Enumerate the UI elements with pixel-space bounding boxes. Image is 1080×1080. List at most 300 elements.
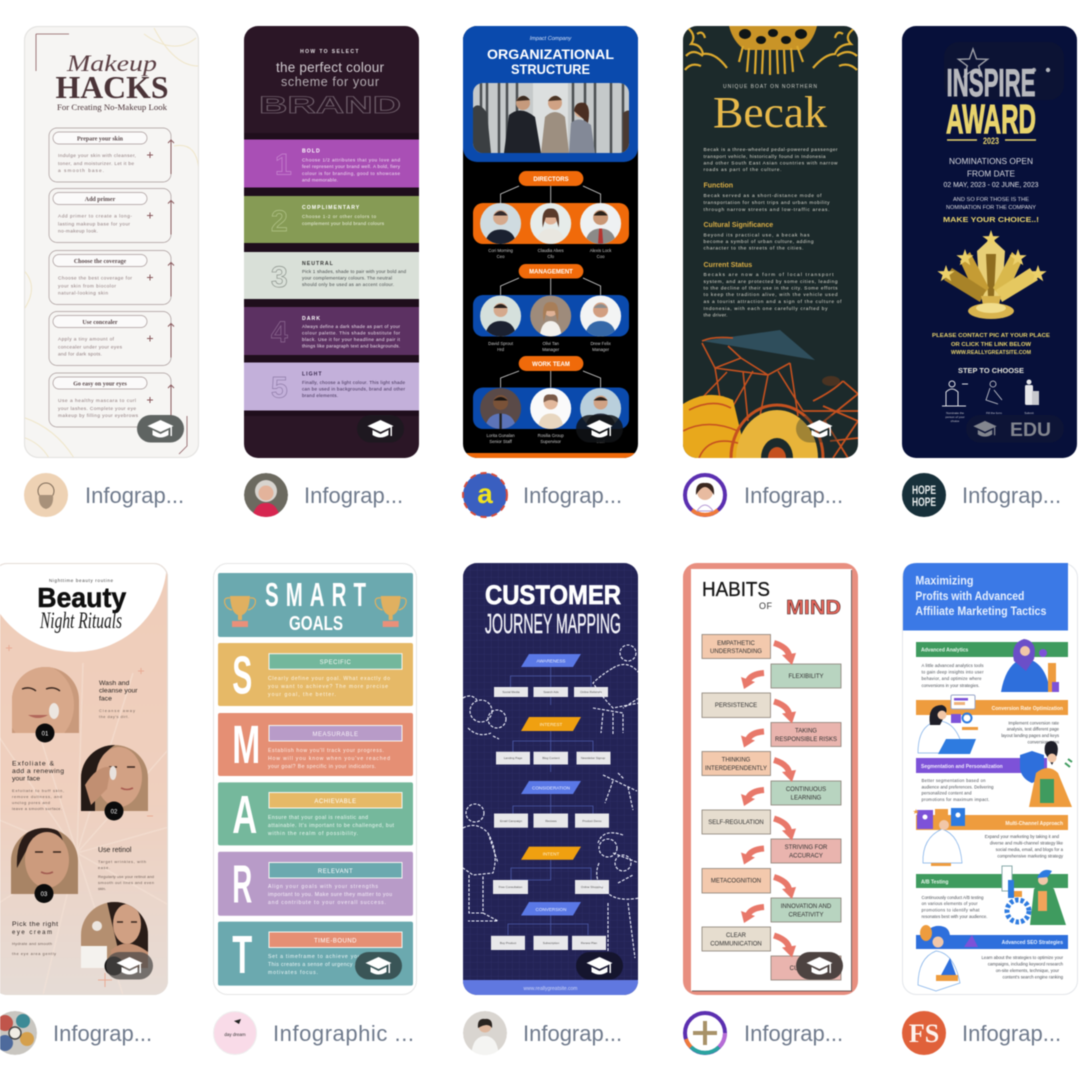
avatar: bearded man line art [24,473,68,517]
illustration: becak vehicle [682,330,859,459]
habit boxes: STRIVING FOR [785,845,828,851]
tip 2: Add primer [85,197,116,203]
text block: nominations: 02 MAY, 2023 - 02 JUNE, 2023 [944,182,1039,189]
tier: work team: Rosilia Group [538,433,564,438]
badge: education cap [796,952,843,980]
habit boxes: CONTINUOUS [786,787,826,793]
band: specific: S [232,646,252,706]
header: blue title: Profits with Advanced [915,591,1024,603]
caption: Infograp... [85,483,184,508]
tier: work team: Supervisor [540,439,562,444]
section: conversion rate optimization: Conversion Rate Optimization [992,706,1063,712]
section: conversion rate optimization: layout landing pages and keys [1001,733,1059,738]
habit boxes: INNOVATION AND [781,904,832,910]
step 3 number: 03 [41,892,48,898]
band 3: neutral: NEUTRAL [302,261,334,267]
heading: Makeup Hacks: HACKS [56,69,168,105]
habit boxes: PERSISTENCE [715,703,757,709]
heading: perfect colour scheme: the perfect colour [276,60,384,75]
header: white arc with title: Beauty [37,582,127,613]
stage: awareness: Social Media [502,690,520,694]
caption: Infograp... [523,483,622,508]
step 2 photo [81,745,148,812]
band 3: neutral: Pick 1 shades, shade to pair with your bold and [302,269,406,274]
band 5: light: Finally, choose a light colour. This light shade [302,380,405,385]
heading: organizational structure: Impact Company [530,36,573,42]
band: time bound: Set a timeframe to achieve your goal. [268,954,380,960]
heading: habits of mind: OF [759,601,772,611]
heading: customer journey mapping: CUSTOMER [485,580,621,610]
stage: intent: Online Shopping [581,885,603,889]
badge: EDU [972,420,1051,438]
tip 4 [49,312,174,366]
step 2 text: unclog pores and [12,800,50,805]
step 3 text: skin. [98,886,106,891]
card: Customer journey mapping [463,563,639,995]
text block: function: through narrow streets and low-traffic areas. [704,207,830,213]
icon: trophy left [225,596,255,627]
stage: conversion [491,902,606,950]
tier: work team: Lorita Gunalan [486,433,515,438]
band: relevant: important to you. Make sure they matter to you [268,892,392,898]
step 3 text: Use retinol [98,847,132,854]
icons: three steps [942,380,1039,423]
band: measurable: MEASURABLE [312,732,359,738]
step 4 text: Hydrate and smooth [12,941,52,946]
heading: Makeup Hacks: Makeup [66,51,157,76]
band 3: neutral: should only be used as an accent colour. [302,282,394,287]
text block: cultural significance: Beyond its practical use, a becak has [704,232,810,238]
ornament: gold batik [685,26,857,75]
band 5: light: LIGHT [302,372,323,378]
section: segmentation and personalization: Better segmentation based on [922,778,986,783]
stage: consideration: Reviews [545,819,557,823]
habit boxes: TAKING [795,728,817,734]
card: SMART goals [214,564,416,994]
band: achievable [218,782,413,845]
band 4: dark: 4 [271,316,288,349]
step 1 number: 01 [42,732,49,738]
text block: function: transportation for short trips and urban mobility [704,200,830,206]
tier: work team: WORK TEAM [532,362,570,368]
tip 2 [49,188,174,242]
band: specific [218,643,413,706]
stage: interest: Newsletter Signup [581,756,605,760]
habit boxes: EMPATHETIC [717,641,756,647]
band: measurable: How will you know when you've reached [268,756,390,762]
section: advanced seo strategies: content's search engine ranking [1002,974,1064,980]
badge: education cap [137,415,184,442]
band 4: dark: things like paragraph text and backgrounds. [302,344,400,348]
heading: Becak: UNIQUE BOAT ON NORTHERN [723,84,817,90]
band 3: neutral: 3 [271,261,288,294]
avatar: HOPE logo: HOPE [912,483,936,497]
text block: function: Becak served as a short-distance mode of [704,193,822,199]
band 1: bold: feel represent your brand well. A bold, fiery [302,164,401,169]
heading: perfect colour scheme: HOW TO SELECT [300,49,360,55]
step 1 text: the day's dirt. [99,714,129,719]
heading: inspire award: 2023 [983,136,999,146]
caption: Infographic ... [273,1021,414,1046]
avatar: pink brand: day dream [224,1032,246,1037]
band 4: dark: DARK [302,316,321,322]
card: Affiliate marketing tactics [902,563,1078,994]
text block: intro: transport vehicle, historically found in Indonesia [704,154,826,160]
step 1 text: Cleanse away [99,708,135,713]
band: relevant: Align your goals with your strengths [268,884,378,890]
caption: Infograp... [962,483,1061,508]
habit boxes: FLEXIBILITY [788,674,824,680]
band 2: complimentary: Choose 1-2 or other colors to [302,214,376,219]
text block: cultural significance: character to the streets of the cities. [704,246,804,252]
section: a/b testing: resonates best with your audience. [922,914,988,919]
tier: work team: Senior Staff [489,439,513,444]
band: relevant [218,852,413,916]
header: blue title: Maximizing [915,576,973,588]
tip 3: natural-looking skin [58,290,108,296]
tip 5: makeup by filling your eyebrows [58,413,139,419]
section: advanced analytics: Advanced Analytics [921,648,969,654]
avatar: FS logo [902,1011,946,1055]
avatar: spiky blue logo: a [477,478,493,509]
band: time bound: motivates focus. [268,970,318,976]
avatar: grey-haired woman [244,473,288,517]
section: advanced analytics [916,639,1068,692]
section: segmentation and personalization: Segmentation and Personalization [921,764,1003,770]
avatar: HOPE logo: HOPE [912,495,936,509]
habit boxes: CURIOSITY [790,966,822,972]
tip 5: Go easy on your eyes [73,382,127,388]
text block: current status: Indonesia, with each one carefully crafted by [704,306,828,312]
section: advanced seo strategies: on-site elements, technique, your [996,968,1060,973]
stage: awareness: Online Referrals [580,690,602,694]
band: achievable: A [232,785,257,845]
tier: management [473,264,629,352]
section: advanced seo strategies: campaigns, including keyword research [988,962,1064,966]
icons: three steps: Fill the form [986,411,1002,415]
text block: contact: OR CLICK THE LINK BELOW [951,342,1032,348]
step 3 photo [11,826,78,894]
band 4: dark [244,307,419,355]
habit boxes: METACOGNITION [711,878,761,884]
stage: interest [496,717,610,764]
section: a/b testing: promotions to identify what [922,908,980,912]
card: Becak [683,26,858,511]
stage: intent: Free Consultation [499,885,523,889]
band 5: light [244,362,419,410]
tip 1: Indulge your skin with cleanser, [58,153,136,159]
step 3 text: Regularly use your retinol and [98,874,154,879]
stage: interest: Landing Page [504,756,523,760]
avatar: HOPE logo [902,473,946,517]
habit boxes: THINKING [722,758,751,764]
band 1: bold: colour is for branding, good to showcase [302,171,400,176]
text block: nominations: FROM DATE [967,170,1015,178]
heading: customer journey mapping: JOURNEY MAPPING [485,608,621,639]
tip 3: your skin from biocolor [58,284,116,290]
step 2 text: your face [12,776,40,782]
tier: management: MANAGEMENT [529,270,573,276]
step 3 text: Target wrinkles, with [98,859,146,864]
stage: consideration: CONSIDERATION [532,786,570,790]
text block: contact: WWW.REALLYGREATSITE.COM [951,350,1031,356]
photo: team walking [473,83,633,153]
band 1: bold: and memorable. [302,178,338,182]
tier: management: Manager [542,347,560,352]
stage: conversion: Renew Plan [581,941,597,945]
tier: directors: Alexis Lock [590,248,612,253]
text block: current status [704,262,842,318]
habit boxes: INTERDEPENDENTLY [705,766,767,772]
habit boxes [702,634,841,980]
stage: conversion: Subscription [543,941,560,945]
badge: EDU: EDU [1010,420,1051,441]
section: advanced seo strategies: Advanced SEO Strategies [1002,940,1063,946]
step 3 text: smooth out lines and even [98,880,154,885]
step 2 text [12,760,64,811]
section: conversion rate optimization: analysis, test different page [1007,726,1060,732]
heading: organizational structure [487,36,614,77]
caption: Infograp... [744,483,843,508]
step 4 text: the eye area gently [12,951,56,956]
step 1 text: cleanse your [99,688,138,694]
band 5: light: 5 [271,372,288,404]
tier: work team [473,356,629,444]
band 2: complimentary [244,196,419,243]
step 2 number [104,802,124,820]
caption: Infograp... [523,1021,622,1046]
section: advanced seo strategies: Learn about the strategies to optimize your [982,955,1064,960]
badge: education cap [576,415,623,442]
band 4: dark: black. Use it for your headline and pair it [302,337,401,342]
heading: inspire award [946,62,1036,146]
tip 1: Prepare your skin [77,136,124,142]
text block: nominations [943,157,1039,224]
section: conversion rate optimization [916,695,1068,754]
tip 5 [49,373,174,427]
section: segmentation and personalization [916,741,1072,807]
card: Organizational structure [463,6,638,458]
section: advanced analytics: A little advanced analytics tools [922,663,984,668]
text block: function [704,182,830,213]
text block: current status: the driver. [704,312,728,318]
stage: awareness: Search Ads [543,690,559,694]
tier: directors [473,171,629,259]
tip 4: and for dark spots. [58,352,102,358]
section: conversion rate optimization: conversion rates [1027,740,1059,744]
band 5: light: can be used in backgrounds, brand and other [302,386,405,392]
band: time bound: T [232,925,252,985]
band 5: light: brand elements. [302,393,338,398]
card: Customer journey mapping: www.reallygreatsite.com [524,986,577,992]
habit boxes: CREATIVITY [789,912,823,918]
stage: intent: INTENT [543,852,559,856]
header: blue title [903,563,1068,630]
text block: nominations: MAKE YOUR CHOICE..! [943,215,1039,224]
heading: perfect colour scheme [259,49,401,119]
text block: current status: Current Status [704,262,752,269]
section: multi-channel approach: Multi-Channel Approach [1005,821,1063,827]
tier: management: Hrd [497,347,505,352]
step 1 text: Wash and [99,680,130,687]
step 2 text: add a renewing [12,768,64,775]
tier: directors: Cori Morning [488,248,514,253]
section: segmentation and personalization: promotions for maximum impact. [922,797,990,802]
heading: customer journey mapping [485,580,621,639]
band: time bound: This creates a sense of urgency and [268,962,364,968]
tip 1: toner, and moisturizer. Let it be [58,161,134,167]
badge: education cap [355,952,402,980]
stage: consideration: Product Demo [582,819,602,823]
arrows: zig-zag flow [741,643,796,958]
stage: intent [493,847,609,894]
caption: Infograp... [304,483,403,508]
stage: conversion: CONVERSION [536,907,566,912]
heading: perfect colour scheme: BRAND [259,92,401,119]
band 1: bold [244,140,419,188]
header band: GOALS [289,613,343,635]
tip 4: Apply a tiny amount of [58,336,115,342]
section: multi-channel approach [913,808,1068,866]
tip 5: your lashes. Complete your eye [58,406,136,412]
section: advanced analytics: to gain deep insights into user [922,670,984,674]
step 3 number [34,884,54,903]
text block: contact [932,333,1050,375]
section: segmentation and personalization: personalized content and [922,790,972,796]
step 2 text: leave a smooth surface. [12,806,62,811]
tier: directors: Cfo [547,254,555,259]
caption: Infograp... [744,1021,843,1046]
icon: gold trophy [937,230,1047,319]
band: specific: you want to achieve? The more precise [268,684,388,690]
heading: Makeup Hacks [56,51,168,112]
section: a/b testing: A/B Testing [921,880,948,886]
habit boxes: LEARNING [791,796,822,802]
doodles: dashed line people and plants [463,645,639,958]
section: advanced analytics: conversions in your strategies. [922,683,980,688]
badge: education cap [357,415,404,442]
band 1: bold: BOLD [302,148,321,154]
band: measurable: Establish how you'll track your progress. [268,748,384,754]
captions and avatars: bottom row [0,1011,1061,1055]
text block: current status: system, and are protected by some cities, leading [704,279,838,285]
section: a/b testing: on various elements of your [922,901,978,906]
band: relevant: and contribute to your overall success. [268,900,386,906]
avatar: woman in white [463,1011,507,1055]
band 2: complimentary: 2 [271,205,288,238]
habit boxes: ACCURACY [789,854,823,860]
header band [218,573,413,637]
stage: consideration [494,781,609,828]
band: time bound: TIME-BOUND [314,938,357,944]
step 1 text: face [99,696,112,702]
tip 1 [49,128,174,182]
heading: habits of mind: HABITS [702,579,770,601]
heading: organizational structure: ORGANIZATIONAL [487,46,614,62]
step 1 photo [12,666,80,734]
tip 5: Use a healthy mascara to curl [58,398,136,404]
text block: contact: STEP TO CHOOSE [958,366,1024,375]
step 4 text [12,921,58,956]
step 2 text: remove dullness, and [12,794,62,799]
step 3 text [98,847,154,891]
badge: education cap [796,415,843,442]
tier: management: Olivi Tan [542,341,560,346]
band: measurable [218,713,413,776]
text block: nominations: NOMINATION FOR THE COMPANY [946,205,1036,211]
step 2 text: Exfoliate to buff skin, [12,788,64,793]
text block: contact: PLEASE CONTACT PIC AT YOUR PLACE [932,333,1050,339]
card: Habits of Mind [683,563,858,995]
avatar: FS logo: FS [909,1019,939,1048]
step 4 text: eye cream [12,930,52,936]
header: white arc with title: Night Rituals [39,608,122,633]
tier: work team: Staff [596,439,606,444]
tier: management: Drew Felix [590,341,612,346]
text block: current status: to keep the tradition alive, with the vehicle used [704,292,838,298]
section: conversion rate optimization: Implement conversion rate [1008,720,1060,726]
caption: Infograp... [53,1021,152,1046]
text block: intro: roads as part of the culture. [704,167,782,173]
band: specific: Clearly define your goal. What exactly do [268,676,390,682]
icons: three steps: Nominate the [946,411,964,415]
band 3: neutral [244,252,419,299]
stage: awareness: AWARENESS [536,658,566,664]
band: achievable: ACHIEVABLE [314,799,357,805]
band: specific: your goal, the better. [268,692,336,698]
stage: conversion: Buy Product [500,941,516,945]
text block: current status: to the decline of their use in the city. Some efforts [704,286,838,292]
band: relevant: RELEVANT [318,869,353,875]
band: achievable: Ensure that your goal is realistic and [268,815,368,821]
section: multi-channel approach: social media, email, and blogs for a [996,847,1064,852]
band: time bound [218,922,413,986]
tier: directors: DIRECTORS [533,177,569,183]
tip 2: Add primer to create a long- [58,214,132,220]
heading: Makeup Hacks: For Creating No-Makeup Look [57,102,168,112]
section: advanced seo strategies [916,925,1068,991]
heading: organizational structure: STRUCTURE [511,61,590,77]
stage: awareness [494,654,608,697]
text block: nominations: NOMINATIONS OPEN [949,157,1033,166]
text block: intro [704,147,838,173]
step 4 photo [81,902,148,970]
tier: management: Manager [592,347,610,352]
header: white arc with title: Nighttime beauty routine [49,578,113,583]
band 2: complimentary: COMPLIMENTARY [302,205,360,211]
tip 3: Choose the best coverage for [58,276,132,282]
avatar: spiky blue logo [463,473,507,517]
heading: habits of mind [702,579,841,619]
habit boxes: COMMUNICATION [710,942,762,948]
band: relevant: R [232,854,252,914]
captions and avatars: top row [24,473,1061,517]
tip 4: concealer under your eyes [58,344,123,350]
caption: Infograp... [962,1021,1061,1046]
stage: interest: Blog Content [542,756,560,760]
section: multi-channel approach: comprehensive marketing strategy [997,854,1064,858]
card: Brand colour scheme [244,26,419,458]
header: blue title: Affiliate Marketing Tactics [915,606,1046,618]
avatar: pink brand [214,1012,256,1054]
heading: Becak: Becak [713,88,827,137]
flow connectors [508,667,593,935]
tip 2: no-makeup look. [58,228,98,234]
avatar: girl in ring [685,475,725,515]
band 4: dark: colour palette. This shade substitute for [302,330,400,336]
text block: intro: and other South East Asian countries with narrow [704,160,838,166]
icon: trophy right [375,596,406,627]
